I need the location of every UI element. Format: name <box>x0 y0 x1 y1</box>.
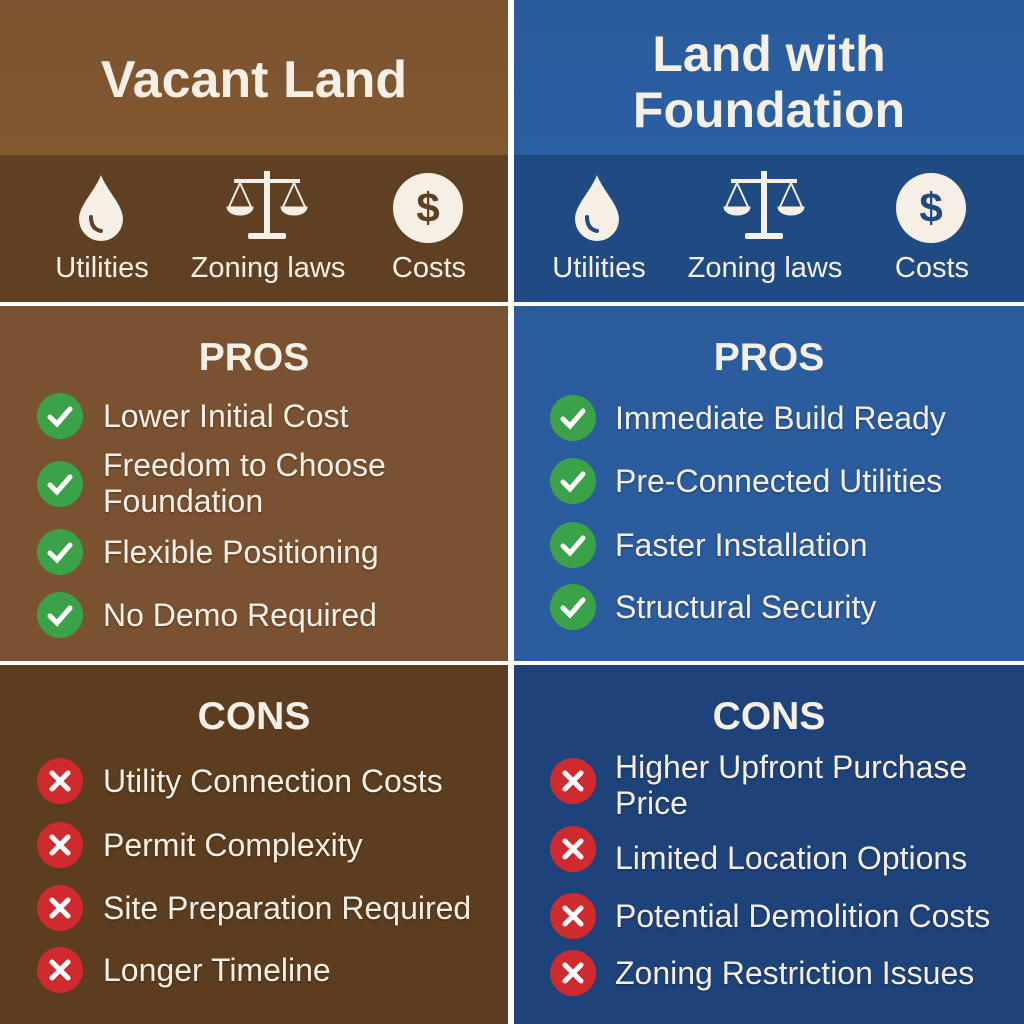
item: zoning restriction issues <box>550 950 974 996</box>
item: no demo required <box>37 592 377 638</box>
label: utilities: Utilities <box>55 252 149 284</box>
item: utility connection costs <box>37 758 443 804</box>
item: lower initial cost: Lower Initial Cost <box>103 398 348 434</box>
item: structural security: Structural Security <box>615 589 876 625</box>
item: pre-connected utilities <box>550 458 942 504</box>
item: faster installation: Faster Installation <box>615 527 868 563</box>
item: immediate build ready: Immediate Build Ready <box>615 400 946 436</box>
item: no demo required: No Demo Required <box>103 597 377 633</box>
panel: left cons <box>0 665 508 1024</box>
item: zoning restriction issues: Zoning Restriction Issues <box>615 955 974 991</box>
panel: vacant land header <box>0 0 508 155</box>
title: land with foundation: Foundation <box>633 82 905 138</box>
icon: dollar: $ <box>919 184 943 231</box>
title: land with foundation: Land with <box>652 26 886 82</box>
heading: pros: PROS <box>714 336 824 379</box>
panel: right pros <box>514 306 1024 661</box>
item: lower initial cost <box>37 393 349 439</box>
item: permit complexity <box>37 822 363 868</box>
heading: cons: CONS <box>713 695 825 738</box>
label: utilities: Utilities <box>552 252 646 284</box>
icon: water drop <box>575 175 619 241</box>
item: freedom to choose foundation: Freedom to Choose <box>103 447 386 483</box>
label: zoning laws: Zoning laws <box>191 252 345 284</box>
item: site preparation required: Site Preparation Required <box>103 890 471 926</box>
panel: left pros <box>0 306 508 661</box>
icon: dollar <box>896 173 966 243</box>
heading: cons: CONS <box>198 695 310 738</box>
icon: water drop <box>79 175 123 241</box>
item: limited location options: Limited Location Options <box>615 840 967 876</box>
item: potential demolition costs <box>550 893 990 939</box>
item: higher upfront purchase price: Higher Upfront Purchase <box>615 749 967 785</box>
item: limited location options <box>550 826 967 878</box>
item: higher upfront purchase price: Price <box>615 785 688 821</box>
icon: dollar <box>393 173 463 243</box>
item: faster installation <box>550 522 868 568</box>
item: freedom to choose foundation <box>37 447 386 519</box>
heading: pros: PROS <box>199 336 309 379</box>
item: utility connection costs: Utility Connection Costs <box>103 763 443 799</box>
label: costs: Costs <box>392 252 466 284</box>
label: zoning laws: Zoning laws <box>688 252 842 284</box>
item: site preparation required <box>37 885 471 931</box>
label: costs: Costs <box>895 252 969 284</box>
item: potential demolition costs: Potential Demolition Costs <box>615 898 990 934</box>
item: flexible positioning <box>37 529 379 575</box>
item: longer timeline: Longer Timeline <box>103 952 331 988</box>
item: immediate build ready <box>550 395 946 441</box>
item: longer timeline <box>37 947 331 993</box>
item: permit complexity: Permit Complexity <box>103 827 363 863</box>
icon: scales <box>226 171 308 239</box>
title: land with foundation <box>633 26 905 138</box>
item: structural security <box>550 584 877 630</box>
item: higher upfront purchase price <box>550 749 967 821</box>
panel: right cons <box>514 665 1024 1024</box>
panel: left icon row <box>0 155 508 302</box>
item: freedom to choose foundation: Foundation <box>103 483 263 519</box>
item: flexible positioning: Flexible Positioning <box>103 534 379 570</box>
icon: scales <box>724 171 804 239</box>
panel: land with foundation header <box>514 0 1024 155</box>
title: vacant land: Vacant Land <box>101 51 407 109</box>
item: pre-connected utilities: Pre-Connected Utilities <box>615 463 942 499</box>
panel: right icon row <box>514 155 1024 302</box>
icon: dollar: $ <box>416 184 440 231</box>
